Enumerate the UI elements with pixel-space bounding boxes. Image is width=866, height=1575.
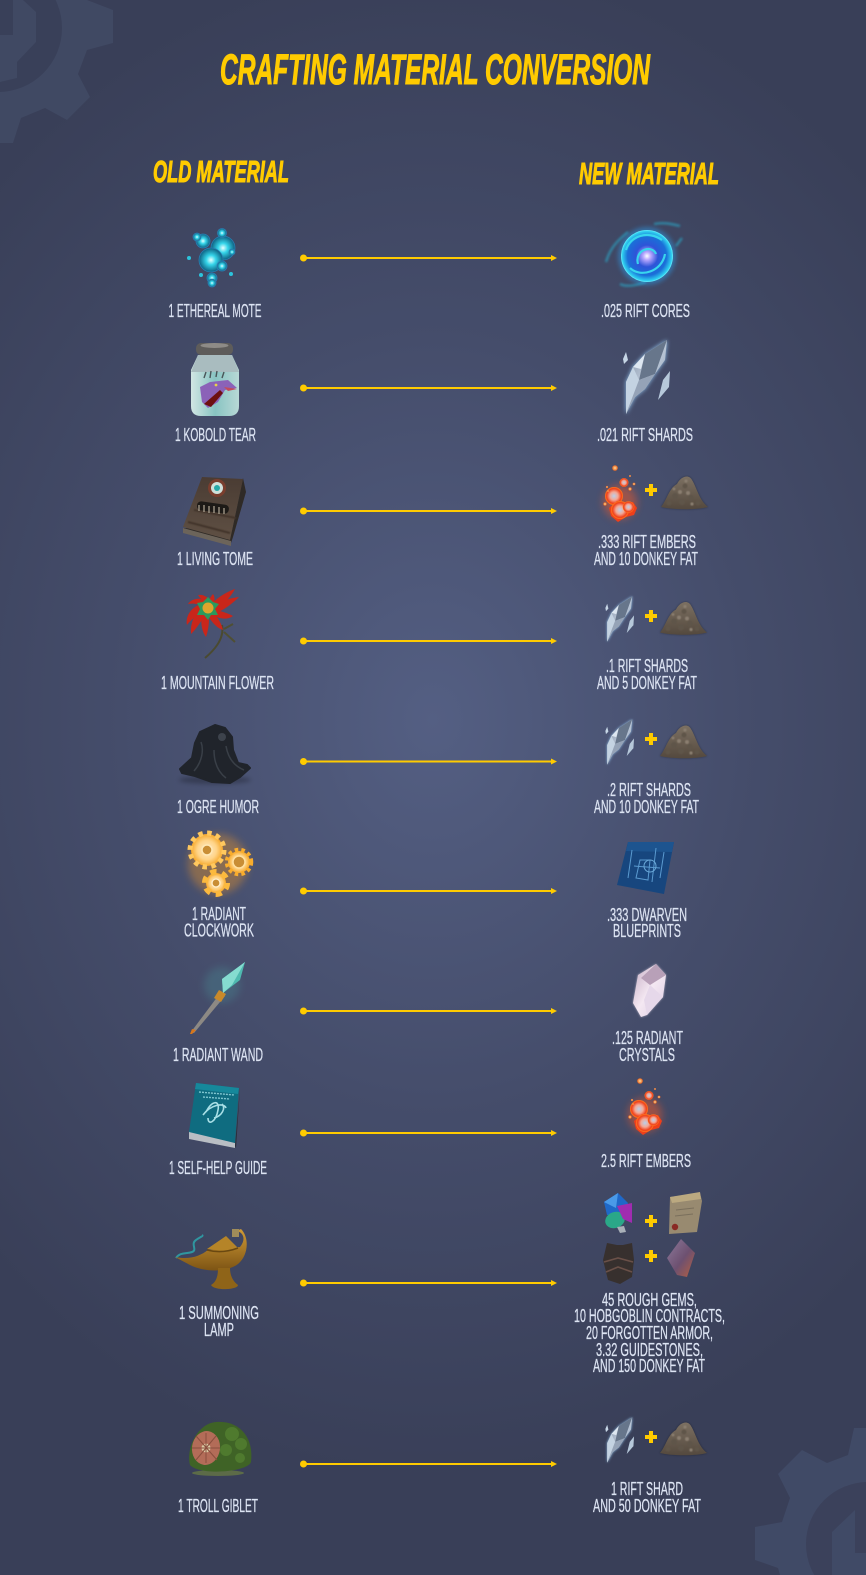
label: .2 rift shards and 10 donkey fat: AND 10 DONKEY FAT xyxy=(594,797,699,817)
label: 1 radiant clockwork: CLOCKWORK xyxy=(184,920,254,940)
arrow xyxy=(300,758,557,765)
heading: old material: OLD MATERIAL xyxy=(153,154,289,189)
icon: self-help guide xyxy=(189,1083,240,1148)
row: troll giblet to shard and fat xyxy=(178,1417,707,1516)
arrow xyxy=(300,1460,557,1468)
icon: plus xyxy=(645,610,657,622)
icon: plus xyxy=(645,484,657,496)
icon: rift shards xyxy=(605,719,634,765)
label: rift materials list: 20 FORGOTTEN ARMOR, xyxy=(586,1323,713,1343)
arrow xyxy=(300,1280,557,1286)
arrow xyxy=(300,384,557,392)
label: .333 dwarven blueprints xyxy=(607,905,687,941)
icon: rift shard xyxy=(605,1417,634,1463)
label: 1 summoning lamp: 1 SUMMONING xyxy=(179,1303,259,1323)
label: 1 summoning lamp xyxy=(179,1303,259,1340)
arrow xyxy=(300,888,557,894)
icon: kobold tear xyxy=(191,343,239,416)
icon: donkey fat xyxy=(660,1423,707,1455)
icon: donkey fat xyxy=(661,477,708,509)
label: 1 self-help guide: 1 SELF-HELP GUIDE xyxy=(169,1158,267,1178)
label: .2 rift shards and 10 donkey fat: .2 RIFT SHARDS xyxy=(607,780,691,800)
label: 1 rift shard and 50 donkey fat: AND 50 DONKEY FAT xyxy=(593,1496,701,1516)
label: .2 rift shards and 10 donkey fat xyxy=(594,780,699,817)
label: 1 radiant clockwork xyxy=(184,904,254,940)
arrow xyxy=(300,1008,557,1014)
icon: plus xyxy=(645,733,657,745)
icon: dwarven blueprints xyxy=(617,842,674,894)
label: .333 rift embers and 10 donkey fat xyxy=(594,532,698,569)
label: 1 radiant clockwork: 1 RADIANT xyxy=(192,904,246,924)
label: 1 kobold tear: 1 KOBOLD TEAR xyxy=(175,425,256,445)
label: 1 rift shard and 50 donkey fat: 1 RIFT SHARD xyxy=(611,1479,683,1499)
label: rift materials list: 10 HOBGOBLIN CONTRACTS, xyxy=(574,1306,725,1326)
label: rift materials list: 3.32 GUIDESTONES, xyxy=(596,1340,703,1360)
icon: rough gems xyxy=(603,1193,632,1233)
row: mountain flower to shards and fat xyxy=(161,589,707,693)
icon: rift shard xyxy=(623,340,670,414)
label: .021 rift shards: .021 RIFT SHARDS xyxy=(597,425,693,445)
label: .125 radiant crystals: CRYSTALS xyxy=(619,1045,675,1065)
icon: troll giblet xyxy=(189,1422,251,1476)
icon: rift core xyxy=(606,223,682,286)
icon: radiant crystal xyxy=(633,964,666,1017)
row: radiant clockwork to dwarven blueprints xyxy=(184,833,687,941)
icon: guidestone xyxy=(667,1239,695,1277)
label: 1 mountain flower: 1 MOUNTAIN FLOWER xyxy=(161,673,274,693)
arrow xyxy=(300,638,557,644)
arrow xyxy=(300,254,557,262)
icon: rift shards xyxy=(605,596,634,642)
icon: plus xyxy=(645,1431,657,1443)
label: rift materials list: AND 150 DONKEY FAT xyxy=(593,1356,705,1376)
row: summoning lamp to multiple materials xyxy=(175,1192,725,1376)
icon: summoning lamp xyxy=(175,1229,247,1289)
row: radiant wand to radiant crystals xyxy=(173,962,683,1065)
icon: living tome xyxy=(183,477,246,546)
label: .1 rift shards and 5 donkey fat xyxy=(597,656,697,693)
icon: hobgoblin contract xyxy=(669,1192,702,1234)
label: 1 ogre humor: 1 OGRE HUMOR xyxy=(177,797,259,817)
decorative gear top-left xyxy=(0,0,113,143)
label: .333 dwarven blueprints: .333 DWARVEN xyxy=(607,905,687,925)
label: rift materials list: 45 ROUGH GEMS, xyxy=(602,1290,697,1310)
icon: donkey fat xyxy=(660,726,707,758)
icon: ethereal mote xyxy=(187,228,235,287)
row: living tome to embers and fat xyxy=(177,465,708,569)
label: .125 radiant crystals: .125 RADIANT xyxy=(612,1028,683,1048)
icon: mountain flower xyxy=(187,589,239,658)
icon: plus xyxy=(645,1250,657,1262)
row: ethereal mote to rift cores xyxy=(168,223,690,321)
icon: rift embers xyxy=(603,465,637,522)
label: 1 rift shard and 50 donkey fat xyxy=(593,1479,701,1516)
label: .125 radiant crystals xyxy=(612,1028,683,1065)
arrow xyxy=(300,1130,557,1136)
icon: ogre humor xyxy=(179,725,251,784)
label: .1 rift shards and 5 donkey fat: AND 5 DONKEY FAT xyxy=(597,673,697,693)
label: 1 troll giblet: 1 TROLL GIBLET xyxy=(178,1496,258,1516)
icon: forgotten armor xyxy=(603,1243,634,1284)
arrow xyxy=(300,508,557,514)
decorative gear bottom-right xyxy=(755,1428,866,1575)
label: rift materials list xyxy=(574,1290,725,1376)
row: ogre humor to shards and fat xyxy=(177,719,707,817)
label: 1 radiant wand: 1 RADIANT WAND xyxy=(173,1045,263,1065)
row: self-help guide to rift embers xyxy=(169,1078,691,1178)
icon: donkey fat xyxy=(660,602,707,635)
label: .333 rift embers and 10 donkey fat: AND 10 DONKEY FAT xyxy=(594,549,698,569)
label: 2.5 rift embers: 2.5 RIFT EMBERS xyxy=(601,1151,691,1171)
label: 1 ethereal mote: 1 ETHEREAL MOTE xyxy=(168,301,262,321)
heading: new material: NEW MATERIAL xyxy=(579,156,719,191)
label: 1 summoning lamp: LAMP xyxy=(204,1320,234,1340)
icon: radiant clockwork xyxy=(188,833,251,894)
icon: plus xyxy=(645,1215,657,1227)
label: .1 rift shards and 5 donkey fat: .1 RIFT SHARDS xyxy=(606,656,688,676)
row: kobold tear to rift shards xyxy=(175,340,693,445)
label: .333 dwarven blueprints: BLUEPRINTS xyxy=(613,921,681,941)
label: .333 rift embers and 10 donkey fat: .333 RIFT EMBERS xyxy=(598,532,696,552)
icon: radiant wand xyxy=(190,962,245,1034)
label: 1 living tome: 1 LIVING TOME xyxy=(177,549,253,569)
label: .025 rift cores: .025 RIFT CORES xyxy=(601,301,690,321)
icon: rift embers xyxy=(628,1078,662,1135)
